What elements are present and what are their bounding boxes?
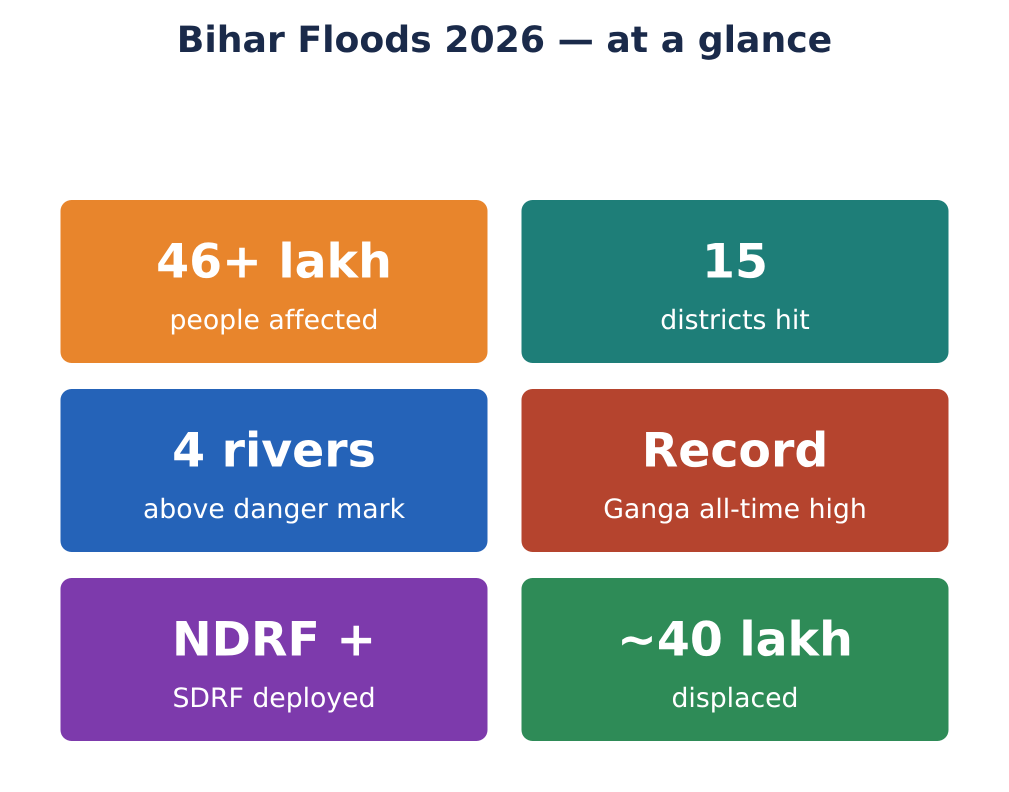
label: districts hit: districts hit <box>660 305 810 336</box>
panel: displaced <box>522 578 948 741</box>
label: Ganga all-time high: Ganga all-time high <box>603 494 867 525</box>
title: Bihar Floods 2026 — at a glance <box>177 18 832 61</box>
panel: districts hit <box>522 200 948 363</box>
stat: NDRF +: NDRF + <box>172 612 376 668</box>
stat: ~40 lakh: ~40 lakh <box>617 612 853 668</box>
panel: record Ganga level <box>522 389 948 552</box>
stat: 15: 15 <box>702 234 768 290</box>
stat: 46+ lakh: 46+ lakh <box>156 234 392 290</box>
label: displaced: displaced <box>671 683 799 714</box>
panel: NDRF and SDRF <box>60 578 488 741</box>
stat: 4 rivers: 4 rivers <box>172 424 376 478</box>
label: SDRF deployed: SDRF deployed <box>172 683 376 714</box>
label: people affected: people affected <box>169 305 379 336</box>
panel: rivers above danger mark <box>60 389 488 552</box>
panel: people affected <box>60 200 488 363</box>
label: above danger mark: above danger mark <box>143 494 406 525</box>
stat: Record: Record <box>642 424 828 478</box>
